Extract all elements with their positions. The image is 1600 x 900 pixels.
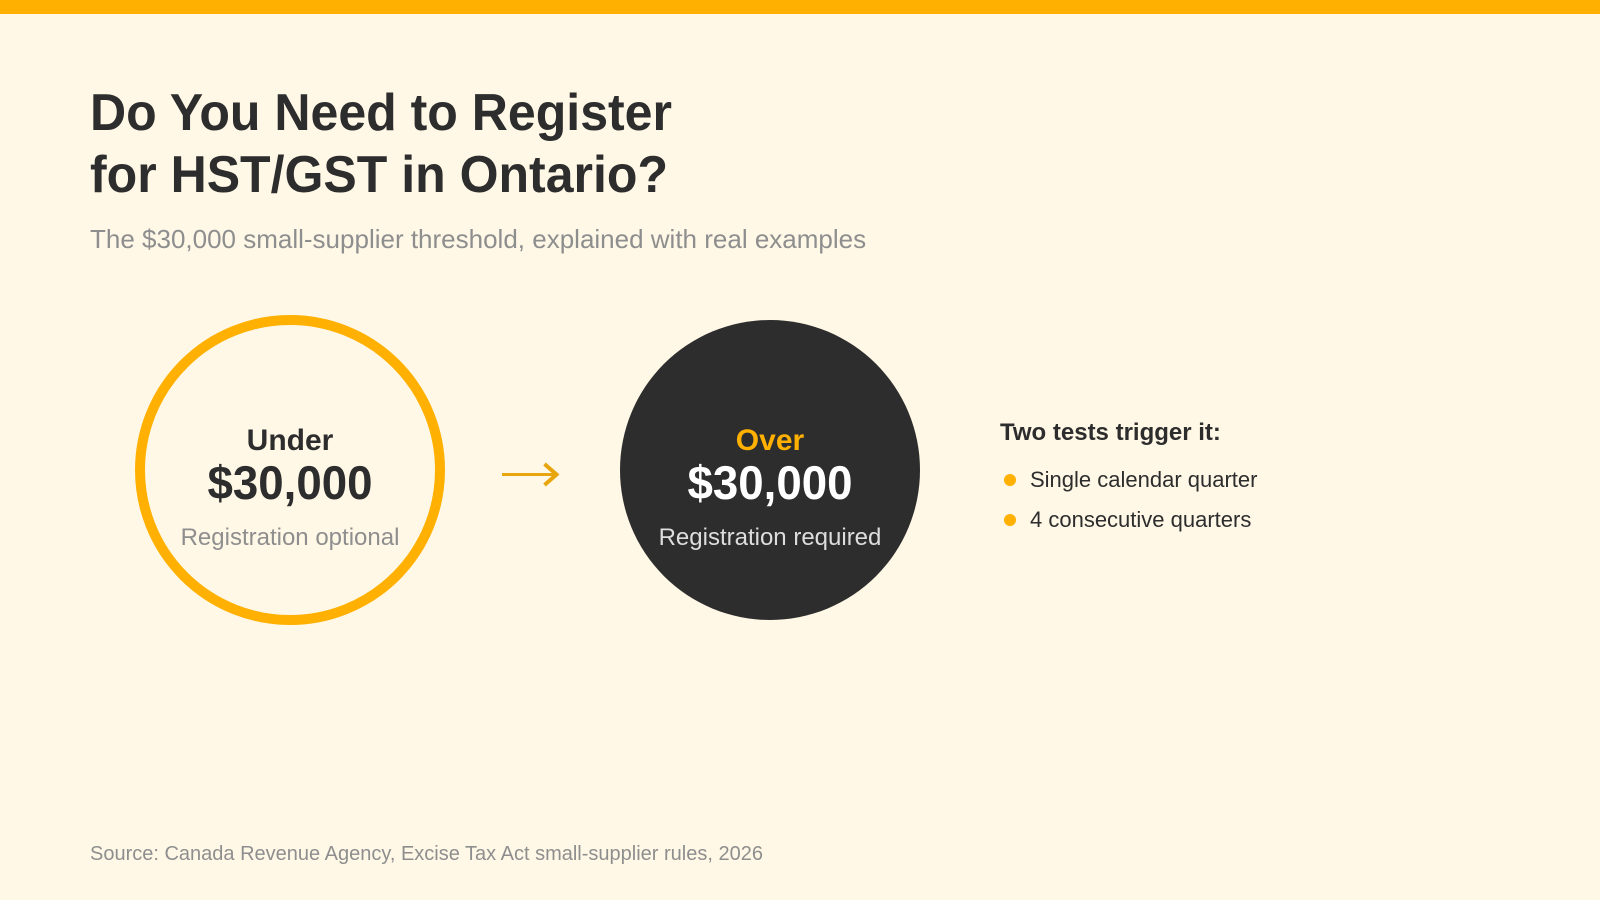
label: over: Over <box>736 424 805 457</box>
test item: 4 consecutive quarters: 4 consecutive quarters <box>1030 507 1251 532</box>
panel: over threshold circle <box>620 320 920 620</box>
amount: over: $30,000 <box>688 456 852 509</box>
panel: under threshold circle <box>140 320 440 620</box>
title <box>90 84 672 204</box>
top accent bar <box>0 0 1600 14</box>
test item: single calendar quarter: Single calendar quarter <box>1030 467 1257 492</box>
tests heading: Two tests trigger it: <box>1000 419 1221 446</box>
status: registration required: Registration required <box>659 524 881 551</box>
status: registration optional: Registration optional <box>181 524 399 551</box>
source note: Source: Canada Revenue Agency, Excise Tax Act small-supplier rules, 2026 <box>90 843 763 865</box>
arrow <box>502 464 556 485</box>
amount: under: $30,000 <box>208 456 372 509</box>
title: for HST/GST in Ontario? <box>90 146 668 204</box>
title: Do You Need to Register <box>90 84 672 142</box>
panel: two tests <box>1000 419 1257 532</box>
label: under: Under <box>247 424 334 457</box>
subtitle: The $30,000 small-supplier threshold, explained with real examples <box>90 224 866 254</box>
